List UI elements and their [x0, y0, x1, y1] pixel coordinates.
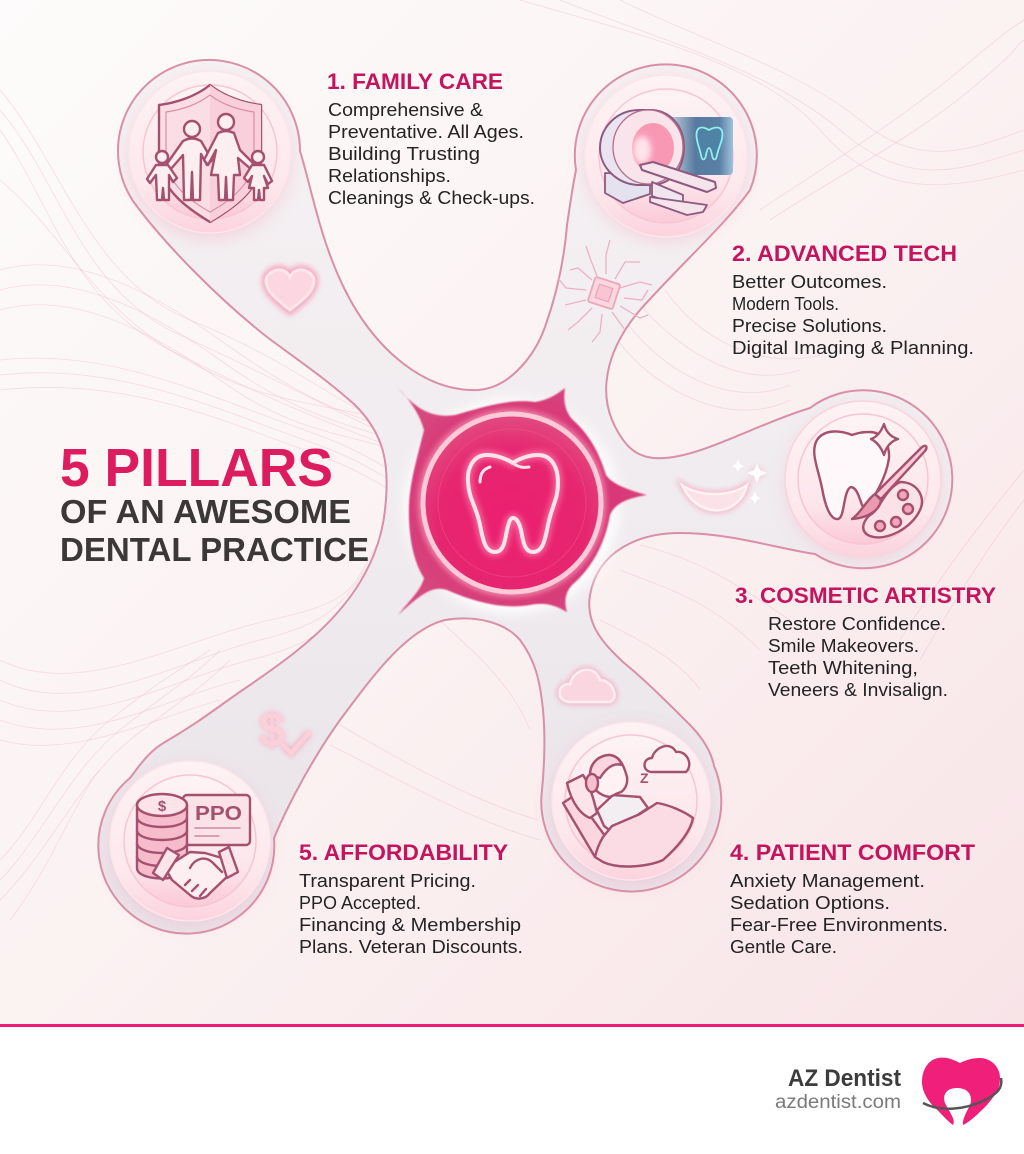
- inner disc: [565, 735, 697, 867]
- hair: [590, 755, 622, 778]
- background wave lines: [0, 0, 1024, 920]
- inner disc: [124, 775, 256, 907]
- hub star blob: [398, 388, 647, 615]
- left cuff: [153, 848, 179, 880]
- icon: neon dollar check: [259, 704, 310, 757]
- bed pedestal: [652, 182, 683, 207]
- outer disc: [552, 722, 710, 880]
- disc glow: [114, 770, 266, 922]
- brush: [875, 446, 926, 499]
- monitor tooth: [696, 128, 722, 160]
- text block: family care: Cleanings & Check-ups.: [328, 188, 535, 208]
- text block: advanced tech: [732, 241, 974, 358]
- outer disc: [585, 75, 747, 237]
- text block: patient comfort: Gentle Care.: [730, 937, 837, 957]
- icon: neon dollar check: $: [259, 704, 286, 757]
- star-shaped arms connecting the five pillars: [98, 60, 952, 934]
- panel: family care circle: [129, 71, 291, 236]
- pillow: [567, 775, 597, 818]
- icon: neon dollar check: $: [259, 704, 286, 757]
- panel: affordability circle: [110, 761, 270, 922]
- bore light: [633, 136, 651, 164]
- text block: patient comfort: Sedation Options.: [730, 893, 890, 913]
- title: 5 PILLARS: [60, 438, 333, 498]
- handshake: [165, 852, 232, 899]
- hub ring glow: [422, 413, 602, 593]
- right cuff: [219, 847, 238, 878]
- disc glow: [132, 80, 288, 236]
- inner disc: [143, 85, 277, 219]
- text block: family care: [327, 69, 535, 208]
- icon: neon smile with sparkles: [682, 460, 767, 510]
- text block: family care: Relationships.: [328, 166, 451, 186]
- scanner front: [613, 110, 683, 184]
- text block: cosmetic artistry: Restore Confidence.: [768, 614, 946, 634]
- text block: family care: Preventative. All Ages.: [328, 122, 524, 142]
- icon: neon cloud: [560, 670, 615, 702]
- panel: patient comfort circle: [552, 722, 710, 882]
- icon: logo tooth: [922, 1058, 1001, 1125]
- disc glow: [588, 82, 744, 238]
- palette: [863, 482, 922, 537]
- scanner monitor: [665, 117, 733, 175]
- text block: cosmetic artistry: [735, 583, 996, 700]
- sleep mark: Z: [640, 770, 649, 786]
- inner disc: [599, 89, 733, 223]
- sparkle: [871, 424, 898, 455]
- text block: advanced tech: 2. ADVANCED TECH: [732, 241, 957, 266]
- mattress: [563, 795, 608, 857]
- panel: advanced tech circle: [585, 75, 747, 238]
- coin ridges: [137, 818, 187, 866]
- outer disc: [129, 71, 291, 233]
- title: DENTAL PRACTICE: [60, 531, 369, 568]
- card text: PPO: [195, 803, 242, 825]
- footer url: azdentist.com: [775, 1092, 901, 1113]
- text block: family care: Building Trusting: [328, 144, 480, 164]
- coin stack: [137, 805, 187, 878]
- text block: affordability: Plans. Veteran Discounts.: [299, 937, 523, 957]
- text block: affordability: Financing & Membership: [299, 915, 521, 935]
- icon: resting patient: [563, 746, 693, 866]
- palette wells: [898, 490, 908, 500]
- text block: patient comfort: [730, 840, 976, 957]
- coin top: [137, 794, 187, 816]
- text block: cosmetic artistry: Teeth Whitening,: [768, 658, 918, 678]
- patient torso: [597, 795, 648, 832]
- scanner bed: [640, 162, 716, 192]
- text block: affordability: Transparent Pricing.: [299, 871, 476, 891]
- text block: advanced tech: Digital Imaging & Planning.: [732, 338, 974, 358]
- text block: patient comfort: 4. PATIENT COMFORT: [730, 840, 976, 865]
- text block: affordability: 5. AFFORDABILITY: [299, 840, 508, 865]
- text block: cosmetic artistry: 3. COSMETIC ARTISTRY: [735, 583, 996, 608]
- disc glow: [555, 730, 707, 882]
- title: OF AN AWESOME: [60, 493, 351, 530]
- text block: cosmetic artistry: Veneers & Invisalign.: [768, 680, 948, 700]
- icon: family and shield: [147, 85, 272, 222]
- outer disc: [110, 761, 270, 921]
- text block: affordability: [299, 840, 523, 957]
- footer: [0, 1024, 1024, 1154]
- icon: neon heart: [265, 268, 315, 312]
- finger lines: [185, 859, 222, 896]
- text block: family care: 1. FAMILY CARE: [327, 69, 503, 94]
- inner disc: [798, 414, 928, 544]
- panel: cosmetic artistry circle: [785, 401, 941, 558]
- icon: circuit chip: [558, 240, 652, 342]
- scanner base: [605, 173, 650, 203]
- patient head: [590, 755, 627, 797]
- text block: family care: Comprehensive &: [328, 100, 483, 120]
- text block: cosmetic artistry: Smile Makeovers.: [768, 636, 919, 656]
- text block: advanced tech: Better Outcomes.: [732, 272, 887, 292]
- thought cloud: [644, 746, 689, 772]
- hub ring: [423, 414, 601, 592]
- disc glow: [789, 410, 937, 558]
- hub inner shade ring: [438, 429, 586, 577]
- bristles: [852, 494, 881, 519]
- bed foot: [650, 197, 707, 215]
- icon: dental imaging scanner: [600, 110, 733, 215]
- hub inner disc: [424, 415, 600, 591]
- card lines: [195, 828, 240, 836]
- central hub: [398, 388, 647, 615]
- PPO card: [183, 795, 250, 845]
- text block: advanced tech: Modern Tools.: [732, 294, 839, 314]
- headphones: [586, 774, 598, 792]
- text block: affordability: PPO Accepted.: [299, 893, 421, 913]
- text block: advanced tech: Precise Solutions.: [732, 316, 887, 336]
- footer brand name: AZ Dentist: [788, 1065, 901, 1092]
- tooth: [814, 431, 889, 519]
- icon: coins PPO card handshake: [137, 794, 250, 899]
- icon: tooth with paintbrush and palette: [814, 424, 926, 537]
- scanner gantry: [600, 110, 684, 185]
- blanket: [595, 803, 693, 866]
- dollar sign: $: [158, 798, 167, 815]
- outer disc: [785, 401, 941, 557]
- icon: hub tooth: [468, 455, 558, 552]
- hub glow: [404, 398, 620, 614]
- title: [60, 438, 369, 568]
- text block: patient comfort: Fear-Free Environments.: [730, 915, 948, 935]
- text block: patient comfort: Anxiety Management.: [730, 871, 925, 891]
- scanner bore: [632, 123, 674, 173]
